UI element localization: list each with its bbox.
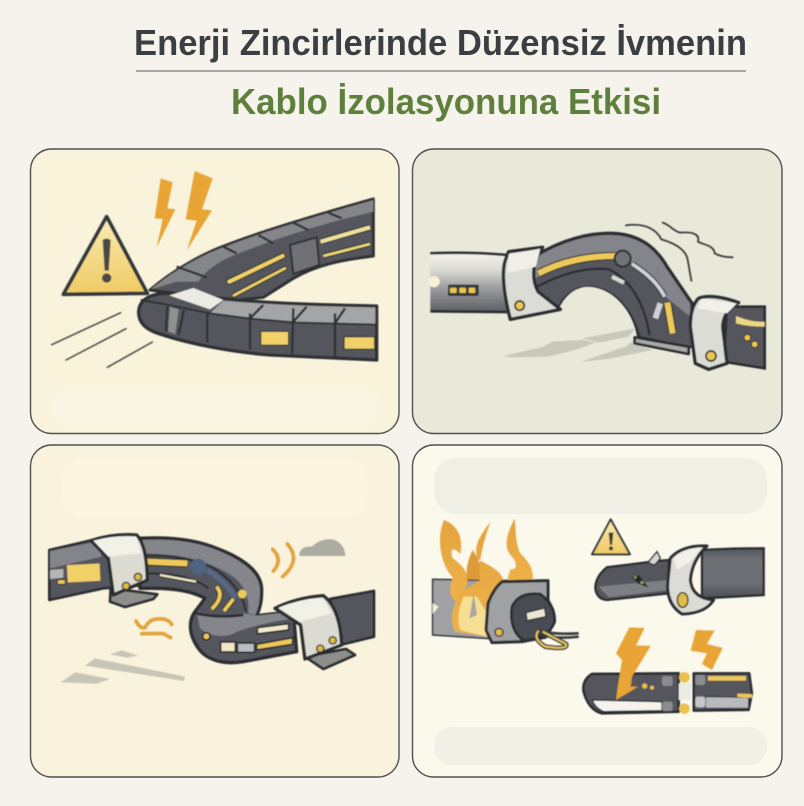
vibration arcs — [136, 544, 293, 638]
broken cable — [583, 672, 752, 714]
vibration squiggles — [626, 223, 733, 281]
curved cable S shape — [140, 538, 297, 663]
left cable — [49, 538, 145, 600]
icon: small warning triangle — [592, 519, 630, 554]
icon: warning triangle — [63, 217, 147, 294]
damaged cable with clamp — [595, 546, 764, 614]
right clamp and foot — [635, 297, 765, 369]
title: Enerji Zincirlerinde Düzensiz İvmenin — [134, 22, 747, 63]
panel: bükülme ve eğilme — [412, 149, 782, 434]
icon: lightning bolts — [155, 171, 213, 251]
icon: lightning bolts over broken cable — [616, 627, 723, 700]
right cable — [330, 591, 374, 645]
left clamp — [91, 535, 157, 607]
burning cable — [433, 518, 533, 640]
shadow on floor — [504, 328, 652, 362]
icon: small cloud — [299, 539, 345, 556]
right clamp — [275, 596, 355, 669]
title: Kablo İzolasyonuna Etkisi — [231, 81, 661, 122]
floor shadows — [61, 650, 185, 684]
motion lines — [52, 313, 152, 367]
title — [134, 22, 747, 122]
panel: izolasyon hasarı sonuçları — [412, 445, 782, 777]
left cable segment — [428, 253, 509, 312]
bent cable arc — [532, 233, 692, 347]
burnt cable end — [486, 581, 579, 648]
left clamp — [503, 247, 560, 319]
panel: ani ivme, zincir dönüşü — [30, 149, 399, 434]
cable chain: lower arm — [139, 288, 377, 360]
panel: titreşim ve sarsıntı — [30, 445, 399, 777]
cable chain: upper arm — [150, 199, 373, 301]
